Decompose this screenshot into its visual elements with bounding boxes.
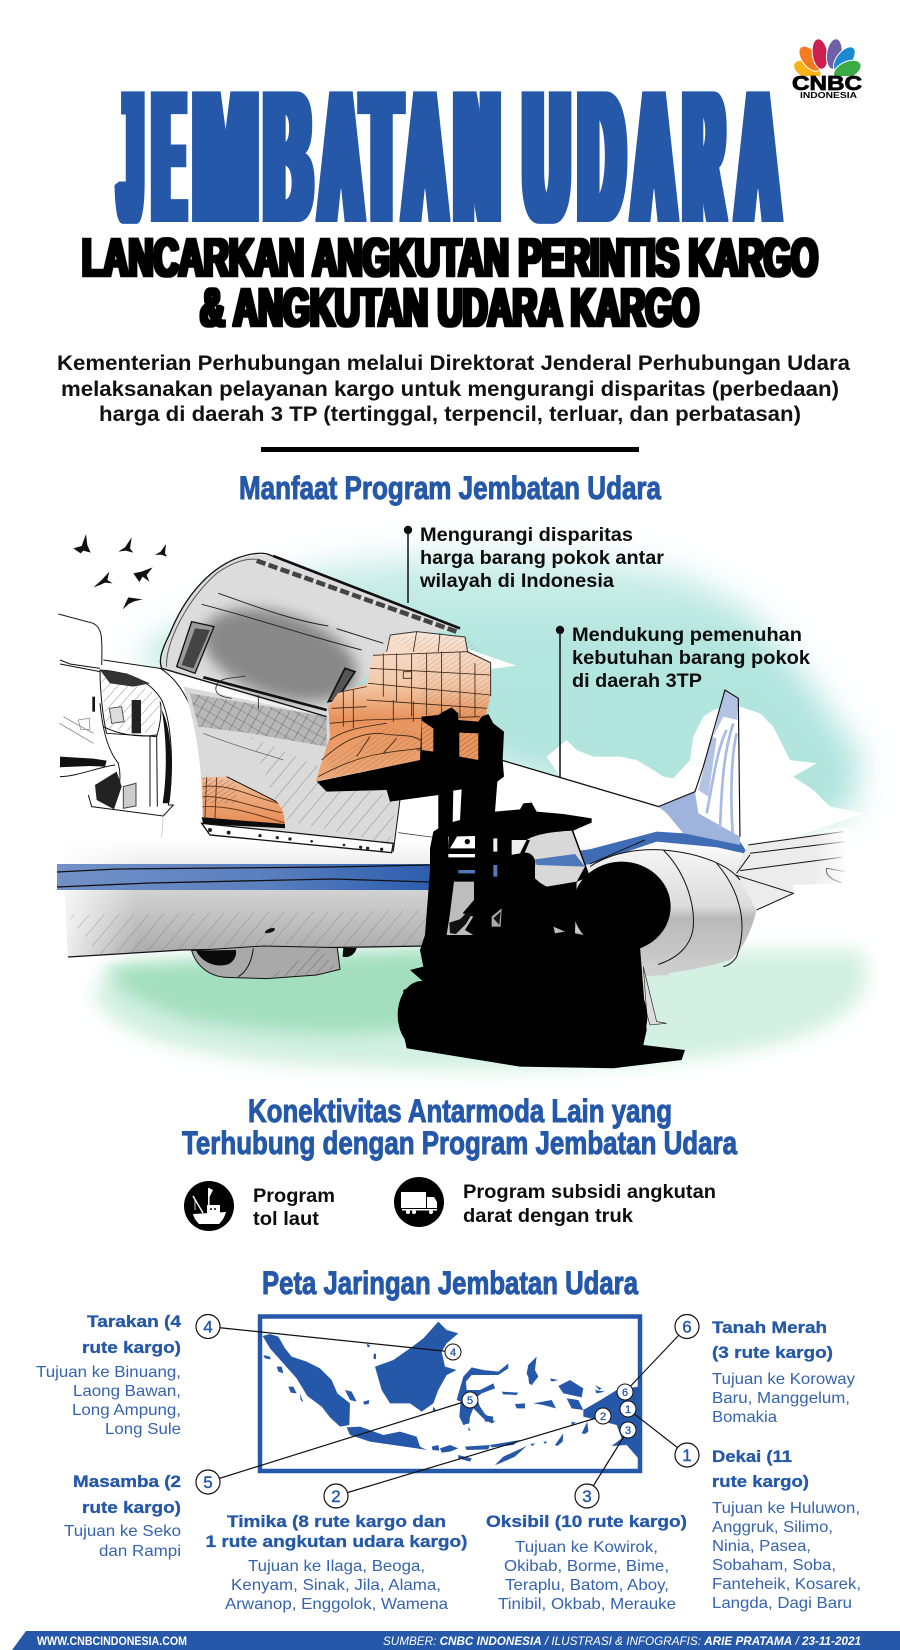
- intro paragraph: Kementerian Perhubungan melalui Direktorat Jenderal Perhubungan Udara: [57, 352, 850, 375]
- map pin numbers: 3: [625, 1425, 631, 1437]
- label: Oksibil: [486, 1512, 687, 1613]
- wing: [733, 832, 845, 910]
- label: Dekai: Langda, Dagi Baru: [712, 1595, 852, 1612]
- numbered markers: [196, 1314, 699, 1508]
- heading: konektivitas: Terhubung dengan Program Jembatan Udara: [182, 1125, 737, 1161]
- title: N: [456, 52, 498, 261]
- label: Dekai: Dekai (11: [712, 1447, 792, 1466]
- forklift silhouette: [317, 707, 685, 1068]
- label: Timika: Timika (8 rute kargo dan: [227, 1512, 446, 1531]
- label: Tarakan: [36, 1312, 182, 1438]
- label: Timika: 1 rute angkutan udara kargo): [206, 1532, 468, 1551]
- text: program tol laut: Program: [253, 1186, 335, 1207]
- title: J: [121, 52, 140, 261]
- label: Tarakan: Long Sule: [105, 1421, 181, 1438]
- heading: peta: Peta Jaringan Jembatan Udara: [262, 1265, 638, 1301]
- label: Masamba: [64, 1472, 181, 1560]
- logo: CNBC Indonesia: [790, 38, 864, 101]
- title: R: [686, 52, 722, 261]
- title: B: [266, 52, 310, 261]
- right engine: [590, 850, 757, 974]
- birds: [73, 534, 167, 609]
- heading: konektivitas: [182, 1093, 737, 1161]
- label: Tarakan: rute kargo): [82, 1338, 181, 1357]
- title: U: [525, 52, 568, 261]
- fuselage: [50, 640, 770, 957]
- bag stack: [202, 777, 285, 824]
- label: Dekai: Anggruk, Silimo,: [712, 1519, 833, 1536]
- title: D: [580, 52, 623, 261]
- label: Tarakan: Laong Bawan,: [73, 1383, 181, 1400]
- title: M: [194, 52, 257, 261]
- label: Timika: Kenyam, Sinak, Jila, Alama,: [231, 1577, 441, 1594]
- label: Masamba: dan Rampi: [99, 1543, 181, 1560]
- label: Oksibil: Oksibil (10 rute kargo): [486, 1512, 687, 1531]
- label: Oksibil: Teraplu, Batom, Aboy,: [505, 1577, 669, 1594]
- infographic canvas: A: [738, 52, 778, 261]
- label: Dekai: Tujuan ke Huluwon,: [712, 1500, 860, 1517]
- map pin numbers: 1: [625, 1404, 631, 1416]
- sky wash: [135, 550, 862, 840]
- clouds: [467, 648, 863, 843]
- logo: CNBC Indonesia: INDONESIA: [800, 90, 857, 100]
- label: Tanah Merah: [712, 1318, 855, 1426]
- cargo door: [160, 553, 491, 853]
- heading: konektivitas: Konektivitas Antarmoda Lain yang: [248, 1093, 672, 1129]
- title: [121, 52, 778, 261]
- landing gear: [643, 967, 667, 1025]
- rear fuselage stripe: [437, 690, 850, 1025]
- text: subsidi truk: [463, 1182, 716, 1227]
- title: A: [405, 52, 445, 261]
- text: subsidi truk: Program subsidi angkutan: [463, 1182, 716, 1203]
- map pin numbers: 5: [467, 1395, 473, 1407]
- cargo pile: [316, 632, 491, 781]
- map pin numbers: 4: [450, 1347, 456, 1359]
- subtitle: [82, 228, 818, 338]
- illustration: cargo plane and forklift: [48, 525, 867, 1070]
- map pins: [445, 1344, 636, 1438]
- logo: CNBC Indonesia: CNBC: [792, 73, 862, 95]
- callout: kebutuhan: [572, 625, 810, 692]
- title: T: [364, 52, 400, 261]
- callout: disparitas: wilayah di Indonesia: [419, 571, 614, 592]
- callout: disparitas: harga barang pokok antar: [420, 548, 665, 569]
- label: Timika: Arwanop, Enggolok, Wamena: [225, 1596, 448, 1613]
- footer bar: WWW.CNBCINDONESIA.COM: [37, 1634, 187, 1648]
- numbered markers: 2: [331, 1487, 341, 1506]
- left cabin door: [58, 614, 200, 837]
- label: Masamba: Tujuan ke Seko: [64, 1523, 181, 1540]
- footer bar: SUMBER: CNBC INDONESIA / ILUSTRASI & INFOGRAFIS: ARIE PRATAMA / 23-11-2021: [383, 1634, 861, 1648]
- heading: manfaat: Manfaat Program Jembatan Udara: [239, 470, 661, 506]
- icon: truck: [394, 1177, 444, 1227]
- title: A: [634, 52, 674, 261]
- footer bar: [12, 1631, 900, 1650]
- connector lines: [208, 1326, 687, 1496]
- numbered markers: 5: [203, 1473, 213, 1492]
- label: Tanah Merah: Tanah Merah: [712, 1318, 827, 1337]
- ground wash: inner: [105, 950, 470, 1034]
- callout: kebutuhan: di daerah 3TP: [572, 671, 702, 692]
- callout: disparitas: [419, 525, 665, 592]
- label: Oksibil: Okibab, Borme, Bime,: [504, 1558, 669, 1575]
- numbered markers: 4: [203, 1318, 213, 1336]
- label: Tanah Merah: Baru, Manggelum,: [712, 1390, 850, 1407]
- intro paragraph: harga di daerah 3 TP (tertinggal, terpencil, terluar, dan perbatasan): [99, 403, 801, 426]
- numbered markers: 6: [682, 1318, 692, 1336]
- numbered markers: 1: [682, 1446, 692, 1465]
- label: Masamba: rute kargo): [82, 1498, 181, 1517]
- label: Tarakan: Long Ampung,: [72, 1402, 181, 1419]
- title: E: [155, 52, 183, 261]
- callout: kebutuhan: kebutuhan barang pokok: [572, 648, 810, 669]
- map pin numbers: [450, 1347, 631, 1437]
- text: subsidi truk: darat dengan truk: [463, 1206, 633, 1227]
- label: Timika: Tujuan ke Ilaga, Beoga,: [248, 1558, 425, 1575]
- label: Tanah Merah: (3 rute kargo): [712, 1343, 833, 1362]
- ground wash: outer: [92, 950, 867, 1070]
- title: A: [321, 52, 361, 261]
- label: Oksibil: Tinibil, Okbab, Merauke: [498, 1596, 676, 1613]
- rivet strip: [202, 823, 393, 853]
- intro paragraph: melaksanakan pelayanan kargo untuk mengurangi disparitas (perbedaan): [61, 378, 839, 401]
- intro paragraph: [57, 352, 850, 426]
- text: program tol laut: tol laut: [253, 1209, 320, 1230]
- label: Tarakan: Tujuan ke Binuang,: [36, 1364, 181, 1381]
- lower engine: [192, 946, 340, 979]
- icon: ship: [184, 1181, 234, 1231]
- callout leader lines: [404, 526, 564, 777]
- map pin numbers: 6: [622, 1387, 628, 1399]
- cargo bay: [183, 687, 400, 852]
- label: Masamba: Masamba (2: [73, 1472, 181, 1491]
- label: Tanah Merah: Bomakia: [712, 1409, 777, 1426]
- label: Dekai: Ninia, Pasea,: [712, 1538, 811, 1555]
- label: Tanah Merah: Tujuan ke Koroway: [712, 1371, 855, 1388]
- map of Indonesia: [208, 1316, 687, 1496]
- tail fin: [658, 690, 740, 837]
- label: Oksibil: Tujuan ke Kowirok,: [515, 1539, 658, 1556]
- numbered markers: 3: [582, 1487, 592, 1506]
- label: Tarakan: Tarakan (4: [87, 1312, 182, 1331]
- label: Dekai: [712, 1447, 861, 1612]
- label: Timika: [206, 1512, 468, 1613]
- map pin numbers: 2: [600, 1411, 606, 1423]
- callout: disparitas: Mengurangi disparitas: [420, 525, 633, 546]
- label: Dekai: rute kargo): [712, 1472, 809, 1491]
- label: Dekai: Fanteheik, Kosarek,: [712, 1576, 861, 1593]
- door-hinge to fuselage line: [398, 833, 433, 837]
- text: program tol laut: [253, 1186, 335, 1230]
- callout: kebutuhan: Mendukung pemenuhan: [572, 625, 802, 646]
- label: Dekai: Sobaham, Soba,: [712, 1557, 836, 1574]
